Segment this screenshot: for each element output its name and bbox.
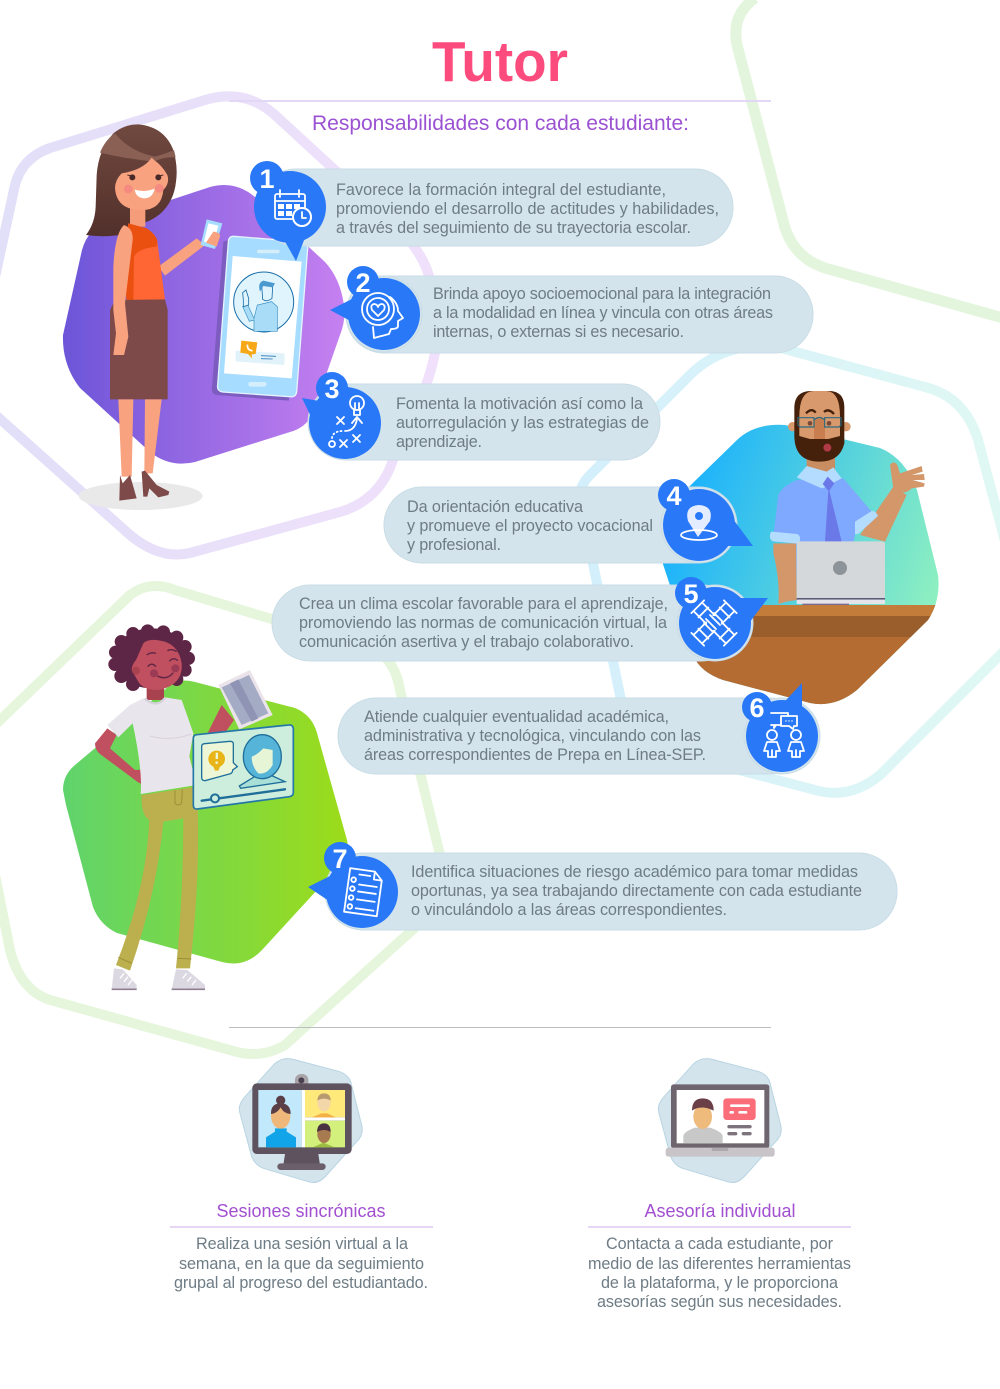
panel: responsibility 6: Atiende cualquier eventualidad académica, bbox=[364, 708, 669, 726]
panel: responsibility 3: autorregulación y las estrategias de bbox=[396, 414, 649, 432]
panel: responsibility 4 bbox=[384, 479, 753, 563]
panel: responsibility 4: y profesional. bbox=[407, 536, 501, 554]
panel: responsibility 5: 5 bbox=[683, 579, 699, 609]
panel: responsibility 6 bbox=[338, 683, 820, 774]
panel: responsibility 1: Favorece la formación integral del estudiante, bbox=[336, 181, 666, 199]
text block: synchronous sessions bbox=[174, 1235, 428, 1292]
panel: responsibility 6: áreas correspondientes de Prepa en Línea-SEP. bbox=[364, 746, 706, 764]
decorative outline: lower green hexagon bbox=[0, 586, 440, 1054]
text block: synchronous sessions: semana, en la que da seguimiento bbox=[179, 1255, 424, 1273]
text block: individual advising: Contacta a cada estudiante, por bbox=[606, 1235, 834, 1253]
text block: individual advising: asesorías según sus necesidades. bbox=[597, 1293, 842, 1311]
panel: responsibility 6: administrativa y tecnológica, vinculando con las bbox=[364, 727, 701, 745]
panel: responsibility 4: Da orientación educativa bbox=[407, 498, 583, 516]
illustration: man with laptop bbox=[770, 391, 925, 605]
panel: responsibility 2: internas, o externas si es necesario. bbox=[433, 323, 684, 341]
panel: responsibility 3: 3 bbox=[324, 374, 340, 404]
text block: individual advising bbox=[588, 1235, 851, 1311]
text block: synchronous sessions: grupal al progreso del estudiantado. bbox=[174, 1274, 428, 1292]
panel: responsibility 3: aprendizaje. bbox=[396, 433, 482, 451]
decorative outline: top right green hexagon bbox=[736, 0, 1000, 320]
title: Tutor bbox=[432, 30, 568, 94]
panel: responsibility 4: 4 bbox=[666, 481, 682, 511]
panel: responsibility 3 bbox=[302, 372, 660, 460]
icon: laptop advisor bbox=[658, 1059, 781, 1182]
decorative outline: right blue-teal hexagon bbox=[580, 345, 1000, 793]
green background blob bbox=[63, 681, 348, 964]
panel: responsibility 7: oportunas, ya sea trabajando directamente con cada estudiante bbox=[411, 882, 862, 900]
decorative outline: purple hexagon bbox=[0, 96, 437, 555]
panel: responsibility 5: comunicación asertiva y el trabajo colaborativo. bbox=[299, 633, 634, 651]
panel: responsibility 2: 2 bbox=[355, 268, 371, 298]
section divider bbox=[229, 1027, 771, 1028]
panel: responsibility 2: a la modalidad en línea y vincula con otras áreas bbox=[433, 304, 773, 322]
text block: synchronous sessions: Realiza una sesión virtual a la bbox=[196, 1235, 408, 1253]
panel: responsibility 7 bbox=[308, 842, 897, 930]
purple background blob bbox=[63, 185, 345, 464]
panel: responsibility 6: 6 bbox=[749, 693, 765, 723]
panel: responsibility 2: Brinda apoyo socioemocional para la integración bbox=[433, 285, 771, 303]
panel: responsibility 1: a través del seguimiento de su trayectoria escolar. bbox=[336, 219, 691, 237]
panel: responsibility 7: o vinculándolo a las áreas correspondientes. bbox=[411, 901, 727, 919]
panel: responsibility 5 bbox=[272, 577, 768, 661]
illustration: woman with tablet and video card bbox=[95, 624, 293, 989]
heading underline right bbox=[588, 1226, 851, 1228]
heading: synchronous sessions: Sesiones sincrónicas bbox=[216, 1201, 386, 1221]
panel: responsibility 1: 1 bbox=[259, 164, 275, 194]
title underline bbox=[229, 100, 771, 102]
icon: video conference monitor bbox=[239, 1059, 362, 1182]
subtitle: Responsabilidades con cada estudiante: bbox=[312, 112, 689, 135]
panel: responsibility 4: y promueve el proyecto vocacional bbox=[407, 517, 653, 535]
illustration: woman with phone bbox=[79, 124, 308, 510]
panel: responsibility 5: promoviendo las normas de comunicación virtual, la bbox=[299, 614, 667, 632]
panel: responsibility 1: promoviendo el desarrollo de actitudes y habilidades, bbox=[336, 200, 719, 218]
panel: responsibility 5: Crea un clima escolar favorable para el aprendizaje, bbox=[299, 595, 668, 613]
text block: individual advising: medio de las diferentes herramientas bbox=[588, 1255, 851, 1273]
cyan background blob bbox=[653, 425, 939, 704]
heading underline left bbox=[170, 1226, 433, 1228]
panel: responsibility 7: Identifica situaciones de riesgo académico para tomar medidas bbox=[411, 863, 858, 881]
heading: individual advising: Asesoría individual bbox=[644, 1201, 796, 1221]
text block: individual advising: de la plataforma, y le proporciona bbox=[601, 1274, 838, 1292]
panel: responsibility 1 bbox=[250, 161, 733, 261]
panel: responsibility 3: Fomenta la motivación así como la bbox=[396, 395, 643, 413]
desk bbox=[696, 605, 936, 704]
panel: responsibility 7: 7 bbox=[332, 844, 348, 874]
panel: responsibility 2 bbox=[330, 266, 813, 353]
